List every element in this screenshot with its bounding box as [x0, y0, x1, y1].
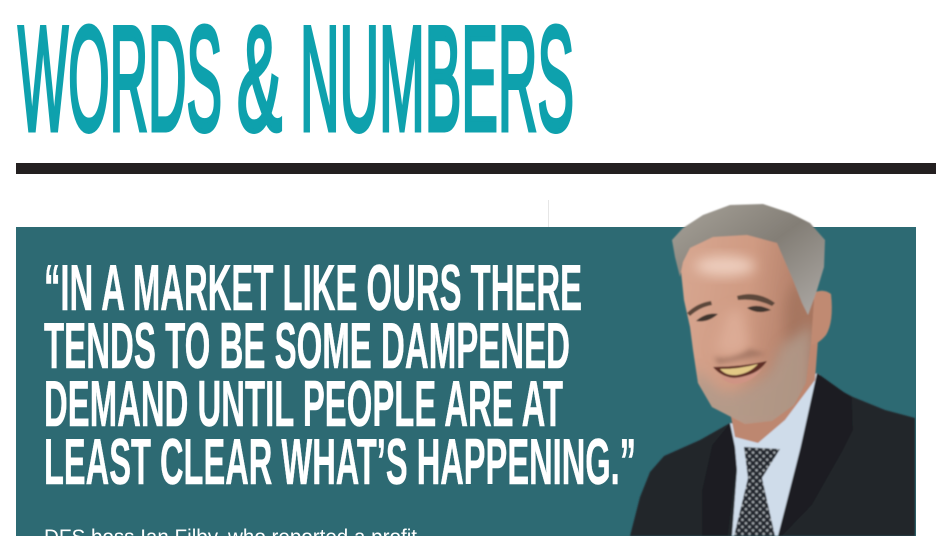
nose shadow	[714, 349, 766, 364]
stubble	[697, 326, 812, 424]
title: &	[237, 0, 282, 162]
lower lip	[734, 370, 760, 380]
ear	[810, 290, 833, 344]
nose	[718, 311, 750, 354]
quote	[44, 251, 636, 498]
face	[680, 234, 814, 424]
tie	[734, 447, 780, 536]
shirt collar and front	[730, 373, 820, 536]
neck	[730, 340, 818, 443]
eyebrows	[687, 294, 775, 316]
left lapel	[702, 423, 736, 536]
divider tick	[548, 200, 549, 227]
right temple shade	[785, 290, 802, 334]
title: WORDS	[18, 0, 222, 162]
header rule	[16, 163, 936, 174]
right lapel	[778, 373, 853, 536]
suit jacket	[629, 392, 916, 536]
teeth	[720, 364, 758, 375]
hair	[672, 204, 825, 315]
forehead highlight	[695, 256, 755, 276]
skin base	[680, 234, 814, 417]
portrait: Ian Filby	[630, 204, 915, 536]
eyes	[696, 306, 771, 321]
mouth	[713, 361, 767, 378]
panel: quote background	[16, 227, 916, 536]
